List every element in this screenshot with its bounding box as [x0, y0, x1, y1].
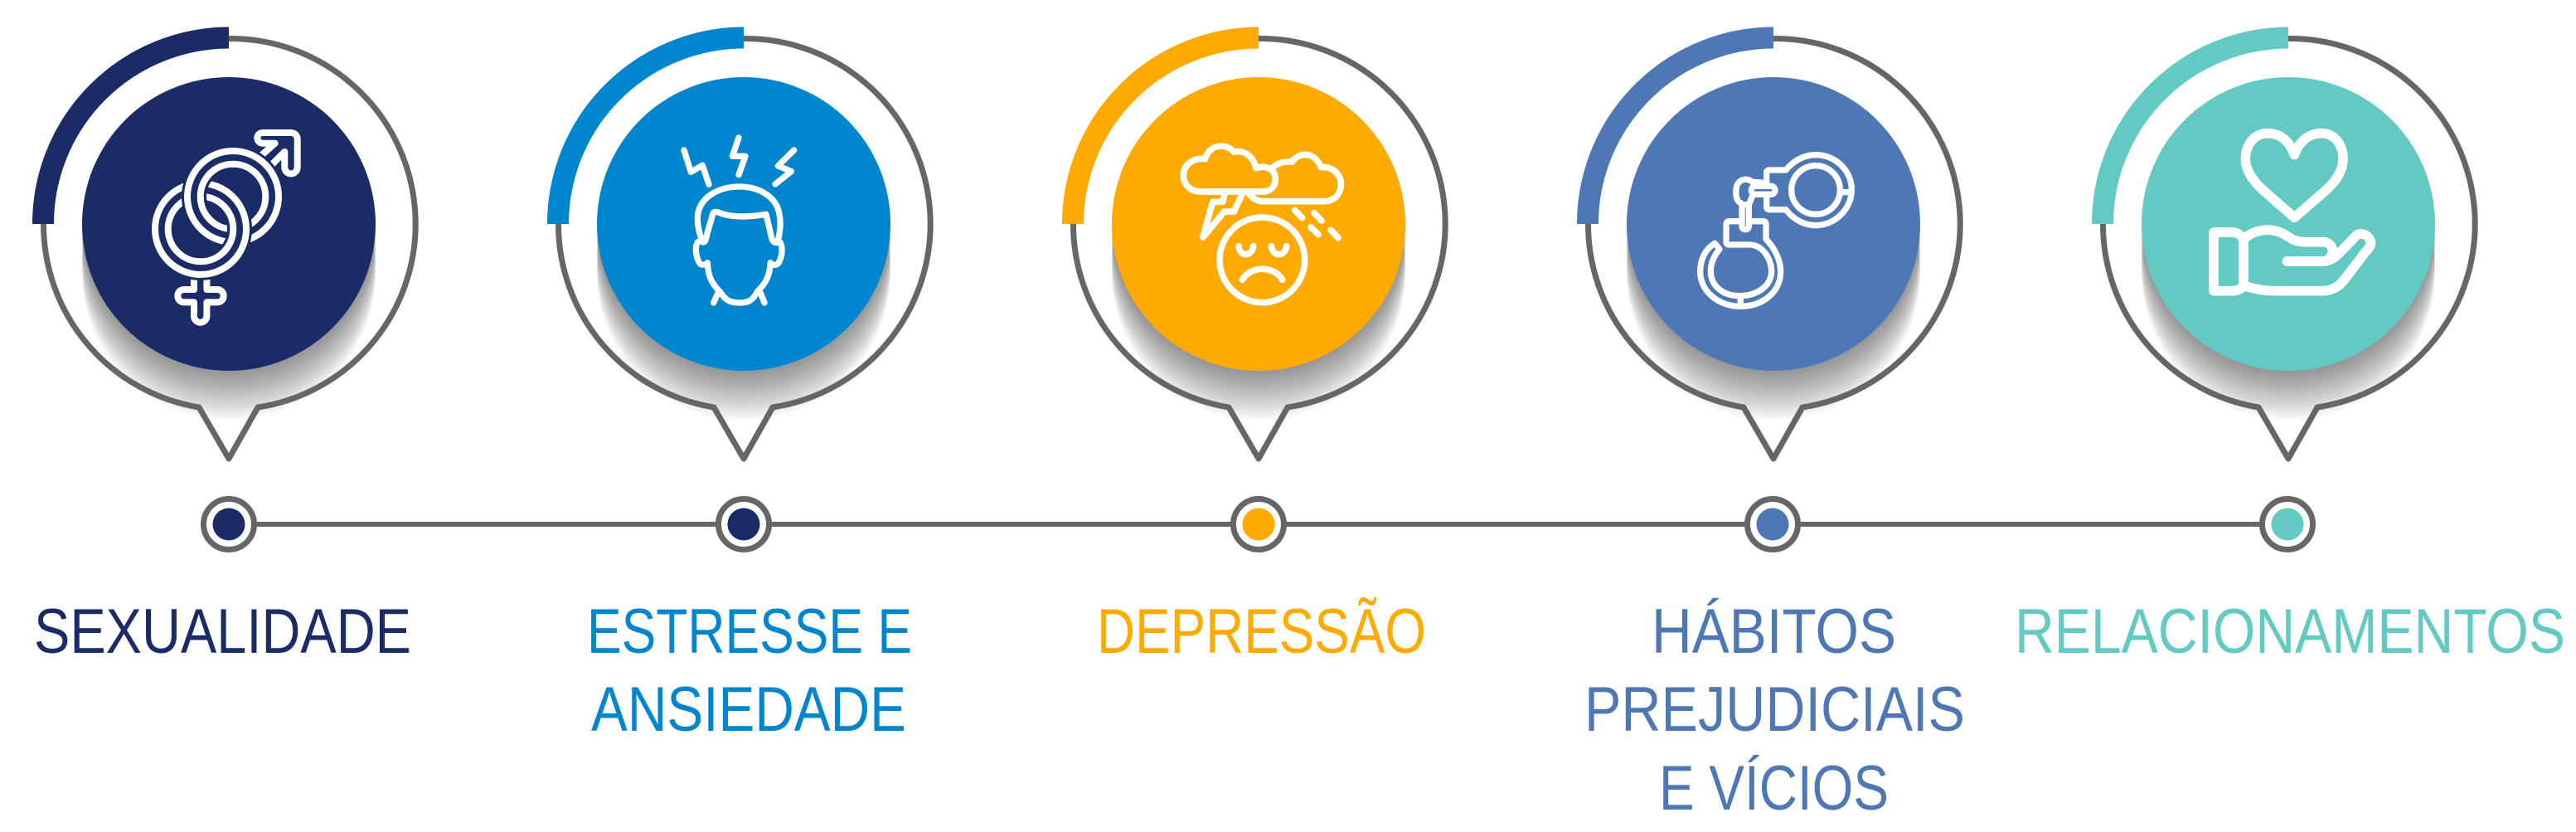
main circle: [597, 77, 890, 371]
label: habitos prejudiciais e vicios: E VÍCIOS: [1659, 753, 1889, 824]
pin outline: [43, 38, 415, 459]
shadow: [82, 80, 376, 421]
pin: depressao: [1073, 38, 1445, 459]
accent arc: [2103, 38, 2288, 224]
label: depressao: DEPRESSÃO: [1097, 596, 1426, 667]
label: estresse e ansiedade: [587, 596, 912, 745]
timeline marker: sexualidade: [204, 499, 254, 549]
icon: stressed head: [684, 138, 794, 303]
pin: estresse e ansiedade: [558, 38, 930, 459]
timeline marker: relacionamentos: [2262, 499, 2313, 549]
icon: heart in hand: [2214, 134, 2370, 291]
pin outline: [1588, 38, 1960, 459]
label: sexualidade: SEXUALIDADE: [34, 596, 411, 667]
main circle: [82, 77, 376, 371]
icon: sad face with clouds: [1183, 146, 1341, 303]
main circle: [1112, 77, 1405, 371]
pin outline: [1073, 38, 1445, 459]
shadow: [2142, 80, 2435, 421]
label: estresse e ansiedade: ANSIEDADE: [591, 674, 906, 745]
timeline line: [229, 522, 2287, 527]
icon: handcuffs: [1700, 155, 1851, 306]
accent arc: [43, 38, 229, 224]
shadow: [1627, 80, 1920, 421]
shadow: [1112, 80, 1405, 421]
shadow: [597, 80, 890, 421]
pin outline: [558, 38, 930, 459]
label: habitos prejudiciais e vicios: [1584, 596, 1965, 824]
pin: relacionamentos: [2103, 38, 2475, 459]
timeline marker: habitos: [1748, 499, 1797, 549]
accent arc: [558, 38, 744, 224]
accent arc: [1073, 38, 1259, 224]
label: habitos prejudiciais e vicios: PREJUDICIAIS: [1584, 674, 1965, 745]
pin outline: [2103, 38, 2475, 459]
accent arc: [1588, 38, 1773, 224]
main circle: [2142, 77, 2435, 371]
pin: habitos prejudiciais e vicios: [1588, 38, 1960, 459]
pin: sexualidade: [43, 38, 415, 459]
main circle: [1627, 77, 1920, 371]
label: habitos prejudiciais e vicios: HÁBITOS: [1652, 596, 1896, 667]
timeline marker: depressao: [1234, 499, 1283, 549]
timeline marker: estresse e ansiedade: [718, 499, 769, 549]
icon: gender symbols: [155, 133, 298, 323]
label: estresse e ansiedade: ESTRESSE E: [587, 596, 912, 667]
